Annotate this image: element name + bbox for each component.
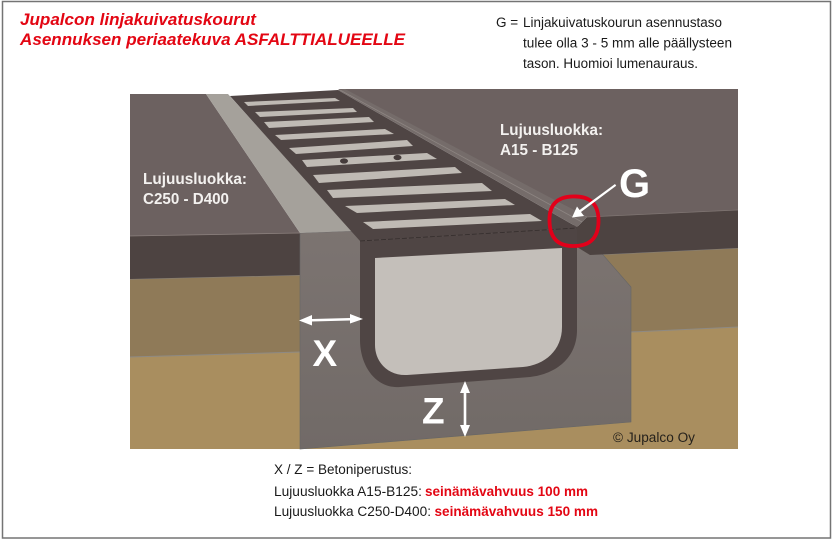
grating slats xyxy=(244,98,542,229)
label: strength class left: Lujuusluokka: xyxy=(143,171,247,188)
text block: X / Z foundation notes: X / Z = Betoniperustus: xyxy=(274,462,412,477)
text block: X / Z foundation notes xyxy=(274,462,598,519)
title: Jupalcon linjakuivatuskourut xyxy=(20,10,257,29)
text block: G definition: Linjakuivatuskourun asennustaso xyxy=(523,15,722,30)
label: strength class left xyxy=(143,171,247,208)
label: X: X xyxy=(312,333,338,374)
label: G: G xyxy=(619,162,650,206)
label: Z: Z xyxy=(422,390,445,432)
right asphalt base layer xyxy=(577,210,738,255)
upper soil layer xyxy=(130,248,738,357)
text block: G definition: G = xyxy=(496,15,518,30)
copyright: © Jupalco Oy xyxy=(613,430,695,445)
title: Asennuksen periaatekuva ASFALTTIALUEELLE xyxy=(19,30,406,49)
left asphalt base layer xyxy=(130,233,300,279)
right curb highlight xyxy=(340,90,582,222)
label: strength class left: C250 - D400 xyxy=(143,191,229,208)
channel interior xyxy=(375,248,562,375)
illustration: drainage channel cross-section xyxy=(130,89,738,449)
arrow: X dimension xyxy=(299,314,363,326)
lower soil layer xyxy=(130,327,738,449)
text block: G definition: tulee olla 3 - 5 mm alle päällysteen xyxy=(523,36,732,50)
arrow: Z dimension xyxy=(460,381,470,437)
grating front line xyxy=(360,228,577,241)
text block: X / Z foundation notes: seinämävahvuus 150 mm xyxy=(434,504,598,519)
label: strength class right: Lujuusluokka: xyxy=(500,122,603,139)
text block: X / Z foundation notes: Lujuusluokka A15-B125: xyxy=(274,484,422,499)
light curb left xyxy=(206,94,352,233)
grating bolts xyxy=(340,155,402,164)
arrow: G pointer xyxy=(572,184,616,218)
soil seam lines xyxy=(130,248,738,357)
channel body xyxy=(360,228,577,387)
label: strength class right xyxy=(500,122,603,159)
text block: X / Z foundation notes: seinämävahvuus 100 mm xyxy=(425,484,588,499)
right curb strip xyxy=(338,89,587,227)
left asphalt surface xyxy=(130,94,300,236)
callout: G red circle xyxy=(549,196,599,246)
text block: G definition xyxy=(496,15,732,71)
text block: X / Z foundation notes: Lujuusluokka C250-D400: xyxy=(274,504,431,519)
right asphalt surface xyxy=(338,89,738,217)
text block: G definition: tason. Huomioi lumenauraus. xyxy=(523,56,698,71)
title xyxy=(19,10,406,49)
grating frame xyxy=(230,90,577,241)
concrete foundation xyxy=(300,225,631,449)
label: strength class right: A15 - B125 xyxy=(500,142,578,159)
asphalt edge highlights xyxy=(130,210,738,236)
